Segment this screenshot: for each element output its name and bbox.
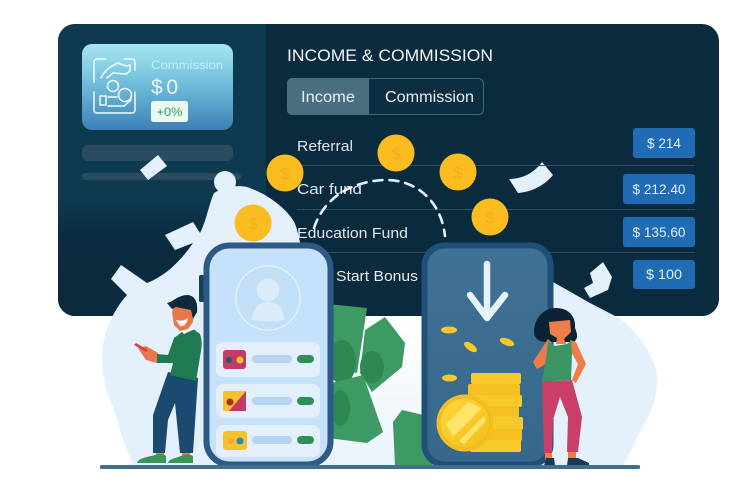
coin [234, 204, 272, 242]
panel: dark dashboard [58, 24, 719, 316]
sidebar placeholder bars [82, 145, 241, 180]
row: start bonus: Start Bonus [336, 268, 418, 285]
coin: $ [454, 165, 463, 182]
row: referral: $ 214 [647, 135, 681, 151]
coin [472, 198, 508, 236]
floating paper notes [140, 155, 612, 298]
row: education fund: $ 135.60 [632, 224, 686, 240]
row dividers [297, 166, 695, 252]
tab switcher: Income [301, 89, 355, 106]
shoes [137, 454, 166, 463]
list row 2 [216, 384, 320, 418]
trousers [542, 380, 582, 453]
row: car fund [623, 174, 695, 204]
ankles [545, 452, 576, 460]
card percentage badge: +0% [156, 105, 183, 119]
coin: $ [486, 210, 495, 227]
tab switcher: Commission [385, 89, 474, 106]
face [172, 305, 194, 331]
right blob [540, 270, 657, 466]
list row 3 [216, 425, 320, 457]
phone in hand [134, 343, 148, 352]
falling coins [234, 134, 508, 242]
row: car fund: $ 212.40 [632, 181, 686, 197]
icon: hand with coins [94, 59, 135, 113]
shoes [544, 458, 589, 466]
falling coin glints [441, 326, 515, 382]
coin: $ [392, 146, 401, 163]
card label: Commission [151, 58, 223, 72]
heading: INCOME & COMMISSION [287, 46, 493, 65]
card percentage badge [151, 101, 188, 122]
row: referral [297, 128, 695, 158]
coin [440, 154, 476, 190]
large gold coin [436, 394, 494, 452]
money bag background blob [102, 186, 318, 465]
phone side button [199, 275, 206, 302]
hair [534, 308, 577, 342]
label: car fund: Car fund [297, 181, 362, 198]
coin [266, 154, 304, 192]
neck and collar [179, 325, 195, 334]
dashed arc transfer path [314, 180, 445, 236]
row: referral: Referral [297, 138, 353, 155]
coin: $ [249, 216, 258, 233]
sweater [157, 328, 202, 381]
row: start bonus [336, 260, 695, 289]
arms [533, 339, 586, 383]
income table [287, 46, 695, 289]
list row 1 [216, 342, 320, 377]
man with smartphone [134, 295, 202, 463]
commission card [82, 44, 233, 130]
face [549, 320, 571, 344]
left phone: profile and cards [199, 246, 330, 464]
tab switcher [287, 78, 484, 115]
pale backdrop behind illustration [300, 316, 570, 466]
floor line [100, 465, 640, 469]
icon: bag knot [214, 171, 236, 193]
trousers [153, 372, 198, 453]
woman gesturing [533, 308, 589, 466]
top [542, 341, 572, 382]
labels overlapping the coins and blob [297, 181, 408, 242]
avatar [236, 266, 300, 330]
right phone: download [424, 246, 550, 464]
green banknotes [328, 304, 433, 466]
hand [138, 346, 158, 363]
smile [176, 318, 188, 326]
coin: $ [281, 166, 290, 183]
coin [378, 134, 414, 172]
label: education fund: Education Fund [297, 225, 408, 242]
hair [167, 295, 197, 319]
row: start bonus: $ 100 [646, 266, 682, 282]
card value: $ 0 [151, 76, 178, 99]
stack of gold coins [468, 373, 523, 452]
ankles [156, 450, 190, 458]
icon: down arrow [470, 264, 505, 318]
row: education fund [623, 217, 695, 247]
